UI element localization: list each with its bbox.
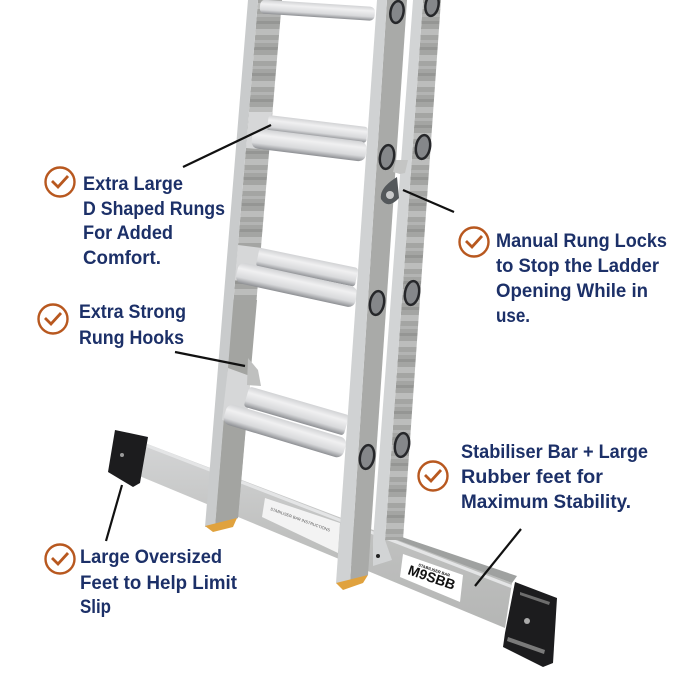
- left black foot: [108, 430, 148, 487]
- left rubber foot of ladder: [205, 518, 237, 532]
- third rung pair: [235, 248, 359, 308]
- callout text: Large Oversized: [80, 547, 222, 568]
- callout: D shaped rungs: [46, 168, 225, 269]
- top rung: [260, 0, 375, 21]
- rung hook: [247, 358, 261, 386]
- callout text: Manual Rung Locks: [496, 231, 667, 252]
- callout: oversized feet: [46, 544, 238, 618]
- check icon: [460, 228, 488, 256]
- right black foot: [503, 582, 557, 667]
- callout text: [83, 174, 225, 269]
- ladder illustration: [108, 0, 557, 667]
- leader line: rung hooks: [175, 352, 245, 366]
- M9SBB label: STABILISER BAR: [418, 562, 451, 578]
- callout text: Stabiliser Bar + Large: [461, 442, 648, 463]
- fourth rung pair: [222, 386, 349, 459]
- second rung pair: [251, 115, 368, 162]
- callout text: D Shaped Rungs: [83, 199, 225, 220]
- rung boss plates on left stile: [222, 112, 272, 425]
- check icon: [418, 462, 448, 490]
- D shaped rung holes: [358, 0, 440, 470]
- callout text: Feet to Help Limit: [80, 573, 238, 594]
- callout text: [79, 302, 186, 349]
- manual rung lock: [381, 160, 408, 204]
- callout text: [461, 442, 648, 513]
- leader line: oversized feet: [106, 485, 122, 541]
- callout text: Extra Strong: [79, 302, 186, 323]
- callout text: Maximum Stability.: [461, 492, 631, 513]
- callout text: Slip: [80, 597, 111, 618]
- leader line: stabiliser bar: [475, 529, 521, 586]
- check icon: [46, 168, 74, 196]
- callout: stabiliser bar: [418, 442, 648, 513]
- callout text: [496, 231, 667, 327]
- right front stile: [336, 0, 407, 583]
- right foot of front stile: [336, 575, 368, 590]
- callout text: [80, 547, 238, 618]
- callout text: Opening While in: [496, 281, 648, 302]
- check icon: [46, 544, 74, 574]
- instruction label on bar: STABILISER BAR INSTRUCTIONS: [270, 506, 331, 533]
- left front stile: [205, 0, 282, 527]
- M9SBB label: [400, 554, 463, 602]
- callout text: Rung Hooks: [79, 328, 184, 349]
- callout text: Extra Large: [83, 174, 183, 195]
- rear stile foot pivot: [376, 554, 380, 558]
- callout text: For Added: [83, 223, 173, 244]
- callout text: to Stop the Ladder: [496, 256, 660, 277]
- leader line: rung locks: [403, 190, 454, 212]
- callout text: Rubber feet for: [461, 467, 604, 488]
- M9SBB label: M9SBB: [406, 562, 458, 593]
- callout text: use.: [496, 306, 530, 327]
- rear ladder stile: [373, 0, 441, 566]
- callout text: Comfort.: [83, 248, 161, 269]
- rungs: [222, 0, 375, 459]
- callout: rung locks: [460, 228, 667, 327]
- check icon: [38, 304, 68, 334]
- leader line: D shaped rungs: [183, 125, 271, 167]
- instruction label on bar: [262, 498, 340, 553]
- callout: rung hooks: [38, 302, 186, 349]
- stabiliser bar: [137, 440, 517, 628]
